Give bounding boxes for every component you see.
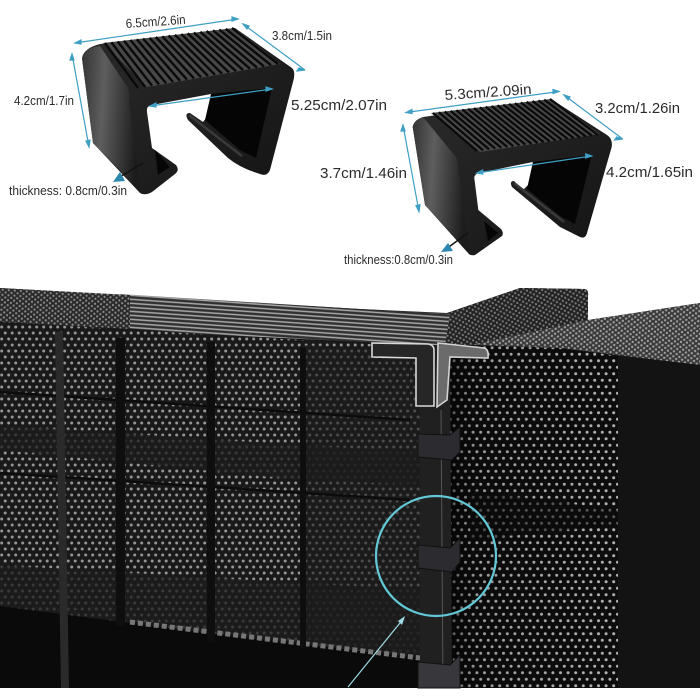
strap 2: [116, 338, 125, 626]
corner post: [420, 345, 452, 688]
label opening A: 5.25cm/2.07in: [291, 98, 387, 114]
dark band lower: [0, 565, 420, 658]
left section top surface, striped: [120, 294, 450, 346]
dimension arrows clip B: [401, 90, 623, 212]
dimension lines: [70, 17, 623, 212]
clip on post, top: [418, 427, 460, 460]
product photo: clip B, small size: [413, 99, 612, 255]
label height B: 3.7cm/1.46in: [320, 166, 407, 182]
back corner top surface: [440, 288, 588, 345]
label depth A: 3.8cm/1.5in: [272, 28, 332, 43]
label height A: 4.2cm/1.7in: [14, 93, 74, 108]
label depth B: 3.2cm/1.26in: [595, 101, 680, 117]
thickness arrow clip A: [113, 163, 143, 182]
clip B inner lip: [514, 183, 564, 222]
clip B silhouette: [413, 99, 612, 255]
strap 4: [300, 348, 306, 648]
label width B: 5.3cm/2.09in: [444, 82, 532, 104]
clip A side face: [82, 46, 141, 192]
strap 3: [207, 342, 215, 642]
dark band upper: [0, 425, 420, 485]
clip A inner lip: [189, 115, 242, 156]
shadow under furniture: [0, 606, 420, 688]
left section top surface, dotted: [0, 288, 130, 329]
corner post seam: [441, 410, 443, 688]
clip A leg slot: [155, 150, 170, 175]
far right dark panel: [618, 356, 700, 688]
dark band shading left panel: [0, 345, 420, 658]
clip B dark interior: [527, 155, 592, 224]
sofa base silhouette: [0, 288, 700, 688]
label opening B: 4.2cm/1.65in: [606, 165, 693, 181]
strap 1: [55, 332, 69, 688]
wicker sofa photo: [0, 288, 700, 688]
callout arrow: [348, 616, 405, 687]
label thickness A: thickness: 0.8cm/0.3in: [9, 183, 127, 198]
clip A silhouette: [82, 28, 294, 194]
vertical straps: [55, 332, 306, 688]
clip on post, bottom: [418, 655, 460, 688]
horizontal seams: [0, 392, 410, 500]
dark band right panel: [470, 490, 620, 540]
label width A: 6.5cm/2.6in: [125, 12, 186, 31]
clip A ribbed top: [103, 28, 280, 88]
right section top surface: [470, 303, 700, 365]
thickness arrow clip B: [441, 233, 468, 252]
dimension arrows clip A: [70, 17, 305, 147]
highlight circle: [376, 496, 496, 616]
clip on post, middle: [418, 538, 460, 572]
left wicker side panel: [0, 322, 420, 658]
clip B leg slot: [484, 221, 498, 241]
clip B ribbed top: [431, 99, 600, 152]
product photo: clip A, large size: [82, 28, 294, 194]
clip A dark interior: [205, 88, 272, 158]
dimension labels: [9, 12, 693, 267]
label thickness B: thickness:0.8cm/0.3in: [344, 252, 453, 267]
woven lower edge: [130, 622, 420, 658]
silver corner bracket right: [437, 343, 488, 407]
dark corner block: [305, 345, 420, 658]
clip B side face: [413, 117, 469, 253]
right wicker side panel: [450, 345, 618, 688]
silver corner bracket left: [372, 343, 434, 406]
right panel left shading: [450, 345, 618, 688]
